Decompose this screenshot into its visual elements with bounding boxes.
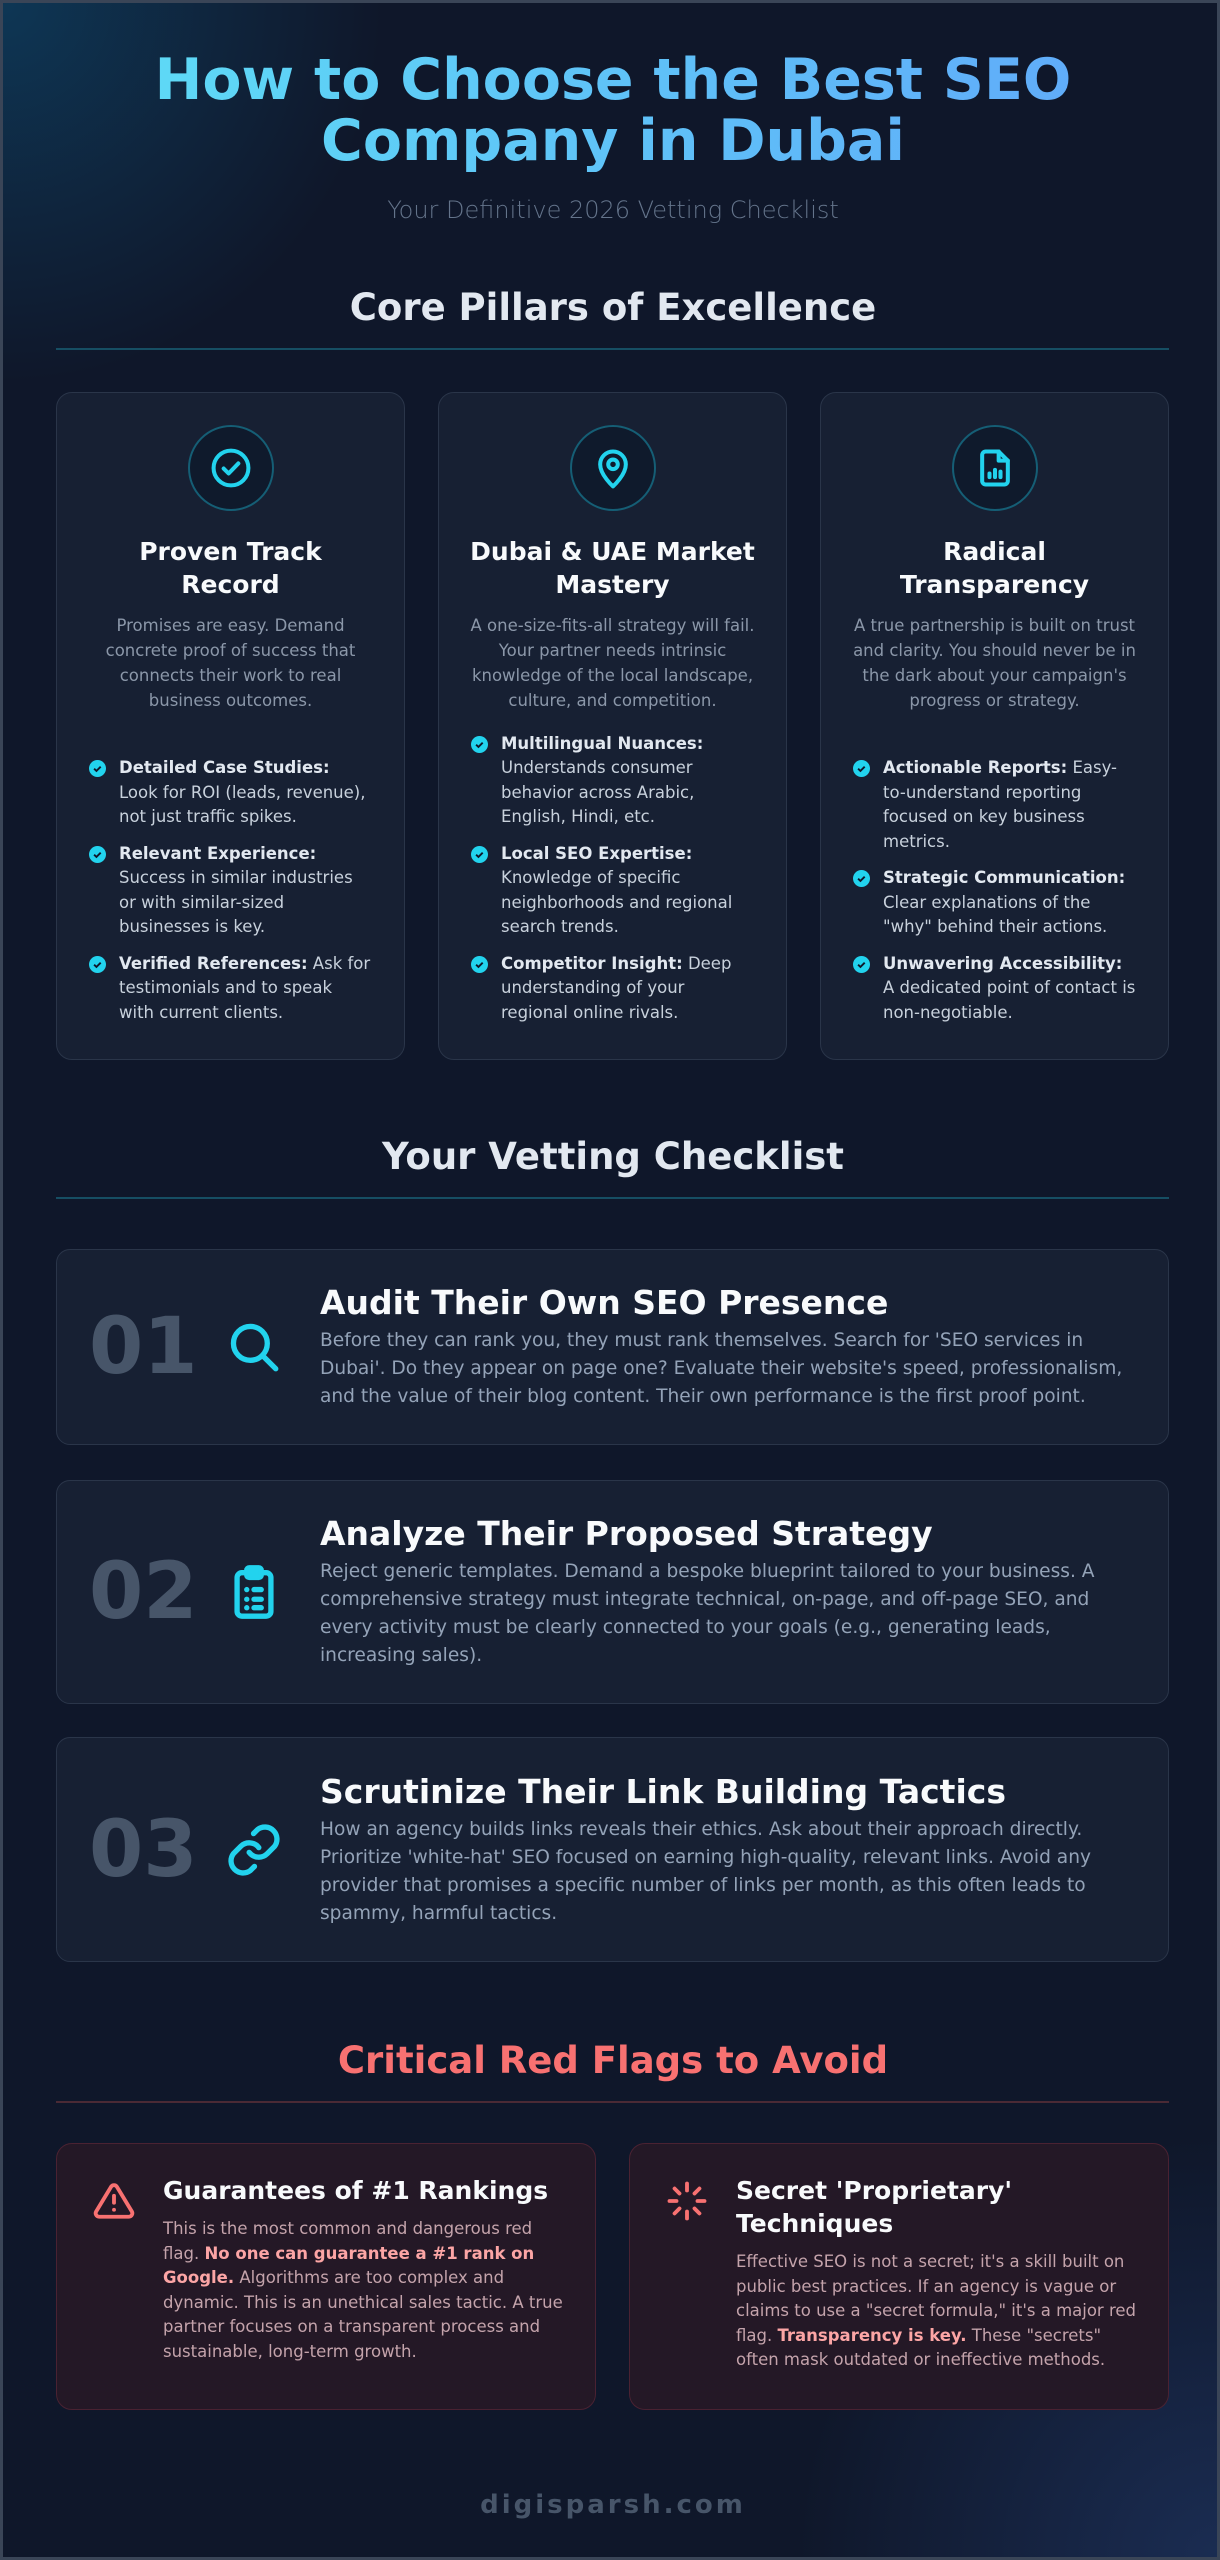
card text: Secret 'Proprietary' Techniques: [736, 2176, 1012, 2238]
item text: Audit Their Own SEO Presence: [320, 1283, 888, 1322]
icon: clipboard: [234, 1565, 274, 1619]
heading: vetting checklist: Your Vetting Checklist: [382, 1135, 844, 1178]
icon: map pin: [570, 425, 656, 511]
card title: [139, 537, 322, 599]
checklist item 03: [56, 1737, 1169, 1962]
bullet list: Actionable Reports: Easy-to-understand reporting focused on key business metrics.: [883, 758, 1117, 850]
card title: Record: [181, 570, 280, 599]
card description: A true partnership is built on trust and clarity. You should never be in the dark about your campaign's progress or strategy.: [853, 616, 1136, 710]
red flag card: guarantees: [56, 2143, 596, 2410]
card text: This is the most common and dangerous red flag. No one can guarantee a #1 rank on Google. Algorithms are too complex and dynamic. This is an unethical sales tactic. A true partner focuses on a transparent process and sustainable, long-term growth.: [163, 2219, 563, 2360]
checklist item 02: [56, 1480, 1169, 1704]
item text: [320, 1514, 1094, 1666]
bullet list: Unwavering Accessibility: A dedicated point of contact is non-negotiable.: [883, 954, 1135, 1022]
number 02: 02: [89, 1547, 198, 1637]
title: How to Choose the Best SEO: [155, 47, 1071, 113]
icon: search: [230, 1324, 278, 1372]
footer: digisparsh.com: [480, 2490, 746, 2520]
icon: report file: [952, 425, 1038, 511]
icon: loader burst: [668, 2182, 706, 2220]
card title: [900, 537, 1089, 599]
panel: proven track record: [56, 392, 405, 1060]
item text: Before they can rank you, they must rank themselves. Search for 'SEO services in Dubai'. Do they appear on page one? Evaluate their website's speed, professionalism, and the value of their blog content. Their own performance is the first proof point.: [320, 1330, 1122, 1407]
bullet list: [471, 734, 732, 1022]
card title: Proven Track: [139, 537, 322, 566]
red flag card: secret techniques: [629, 2143, 1169, 2410]
card title: Mastery: [555, 570, 670, 599]
card text: Effective SEO is not a secret; it's a skill built on public best practices. If an agency is vague or claims to use a "secret formula," it's a major red flag. Transparency is key. These "secrets" often mask outdated or ineffective methods.: [736, 2252, 1136, 2369]
card text: [736, 2176, 1136, 2369]
card text: Guarantees of #1 Rankings: [163, 2176, 548, 2205]
number 01: 01: [89, 1302, 198, 1392]
icon: link: [228, 1824, 280, 1876]
bullet list: Relevant Experience: Success in similar industries or with similar-sized businesses is key.: [119, 844, 353, 936]
bullet list: Strategic Communication: Clear explanations of the "why" behind their actions.: [883, 868, 1125, 936]
title: [3, 50, 1220, 172]
item text: Reject generic templates. Demand a bespoke blueprint tailored to your business. A comprehensive strategy must integrate technical, on-page, and off-page SEO, and every activity must be clearly connected to your goals (e.g., generating leads, increasing sales).: [320, 1561, 1094, 1666]
icon: check circle: [188, 425, 274, 511]
card title: Dubai & UAE Market: [470, 537, 755, 566]
card description: Promises are easy. Demand concrete proof of success that connects their work to real business outcomes.: [106, 616, 355, 710]
bullet list: [853, 758, 1135, 1022]
bullet list: Verified References: Ask for testimonials and to speak with current clients.: [119, 954, 370, 1022]
bullet list: Detailed Case Studies: Look for ROI (leads, revenue), not just traffic spikes.: [119, 758, 365, 826]
heading: core pillars: Core Pillars of Excellence: [350, 286, 876, 329]
bullet list: Competitor Insight: Deep understanding of your regional online rivals.: [501, 954, 731, 1022]
icon: warning: [94, 2183, 134, 2219]
title: Company in Dubai: [321, 108, 905, 174]
card title: Radical: [943, 537, 1046, 566]
number 03: 03: [89, 1804, 198, 1894]
item text: Analyze Their Proposed Strategy: [320, 1514, 933, 1553]
panel: radical transparency: [820, 392, 1169, 1060]
card description: A one-size-fits-all strategy will fail. Your partner needs intrinsic knowledge of the local landscape, culture, and competition.: [471, 616, 754, 710]
heading: red flags: Critical Red Flags to Avoid: [338, 2039, 888, 2082]
bullet list: [89, 758, 370, 1022]
item text: [320, 1772, 1091, 1924]
item text: [320, 1283, 1122, 1407]
card title: [470, 537, 755, 599]
panel: dubai market mastery: [438, 392, 787, 1060]
subtitle: Your Definitive 2026 Vetting Checklist: [387, 196, 839, 224]
card title: Transparency: [900, 570, 1089, 599]
item text: How an agency builds links reveals their ethics. Ask about their approach directly. Prioritize 'white-hat' SEO focused on earning high-quality, relevant links. Avoid any provider that promises a specific number of links per month, as this often leads to spammy, harmful tactics.: [320, 1818, 1091, 1924]
bullet list: Local SEO Expertise: Knowledge of specific neighborhoods and regional search trends.: [501, 844, 732, 936]
checklist item 01: [56, 1249, 1169, 1445]
item text: Scrutinize Their Link Building Tactics: [320, 1772, 1006, 1810]
bullet list: Multilingual Nuances: Understands consumer behavior across Arabic, English, Hindi, etc.: [501, 734, 703, 826]
